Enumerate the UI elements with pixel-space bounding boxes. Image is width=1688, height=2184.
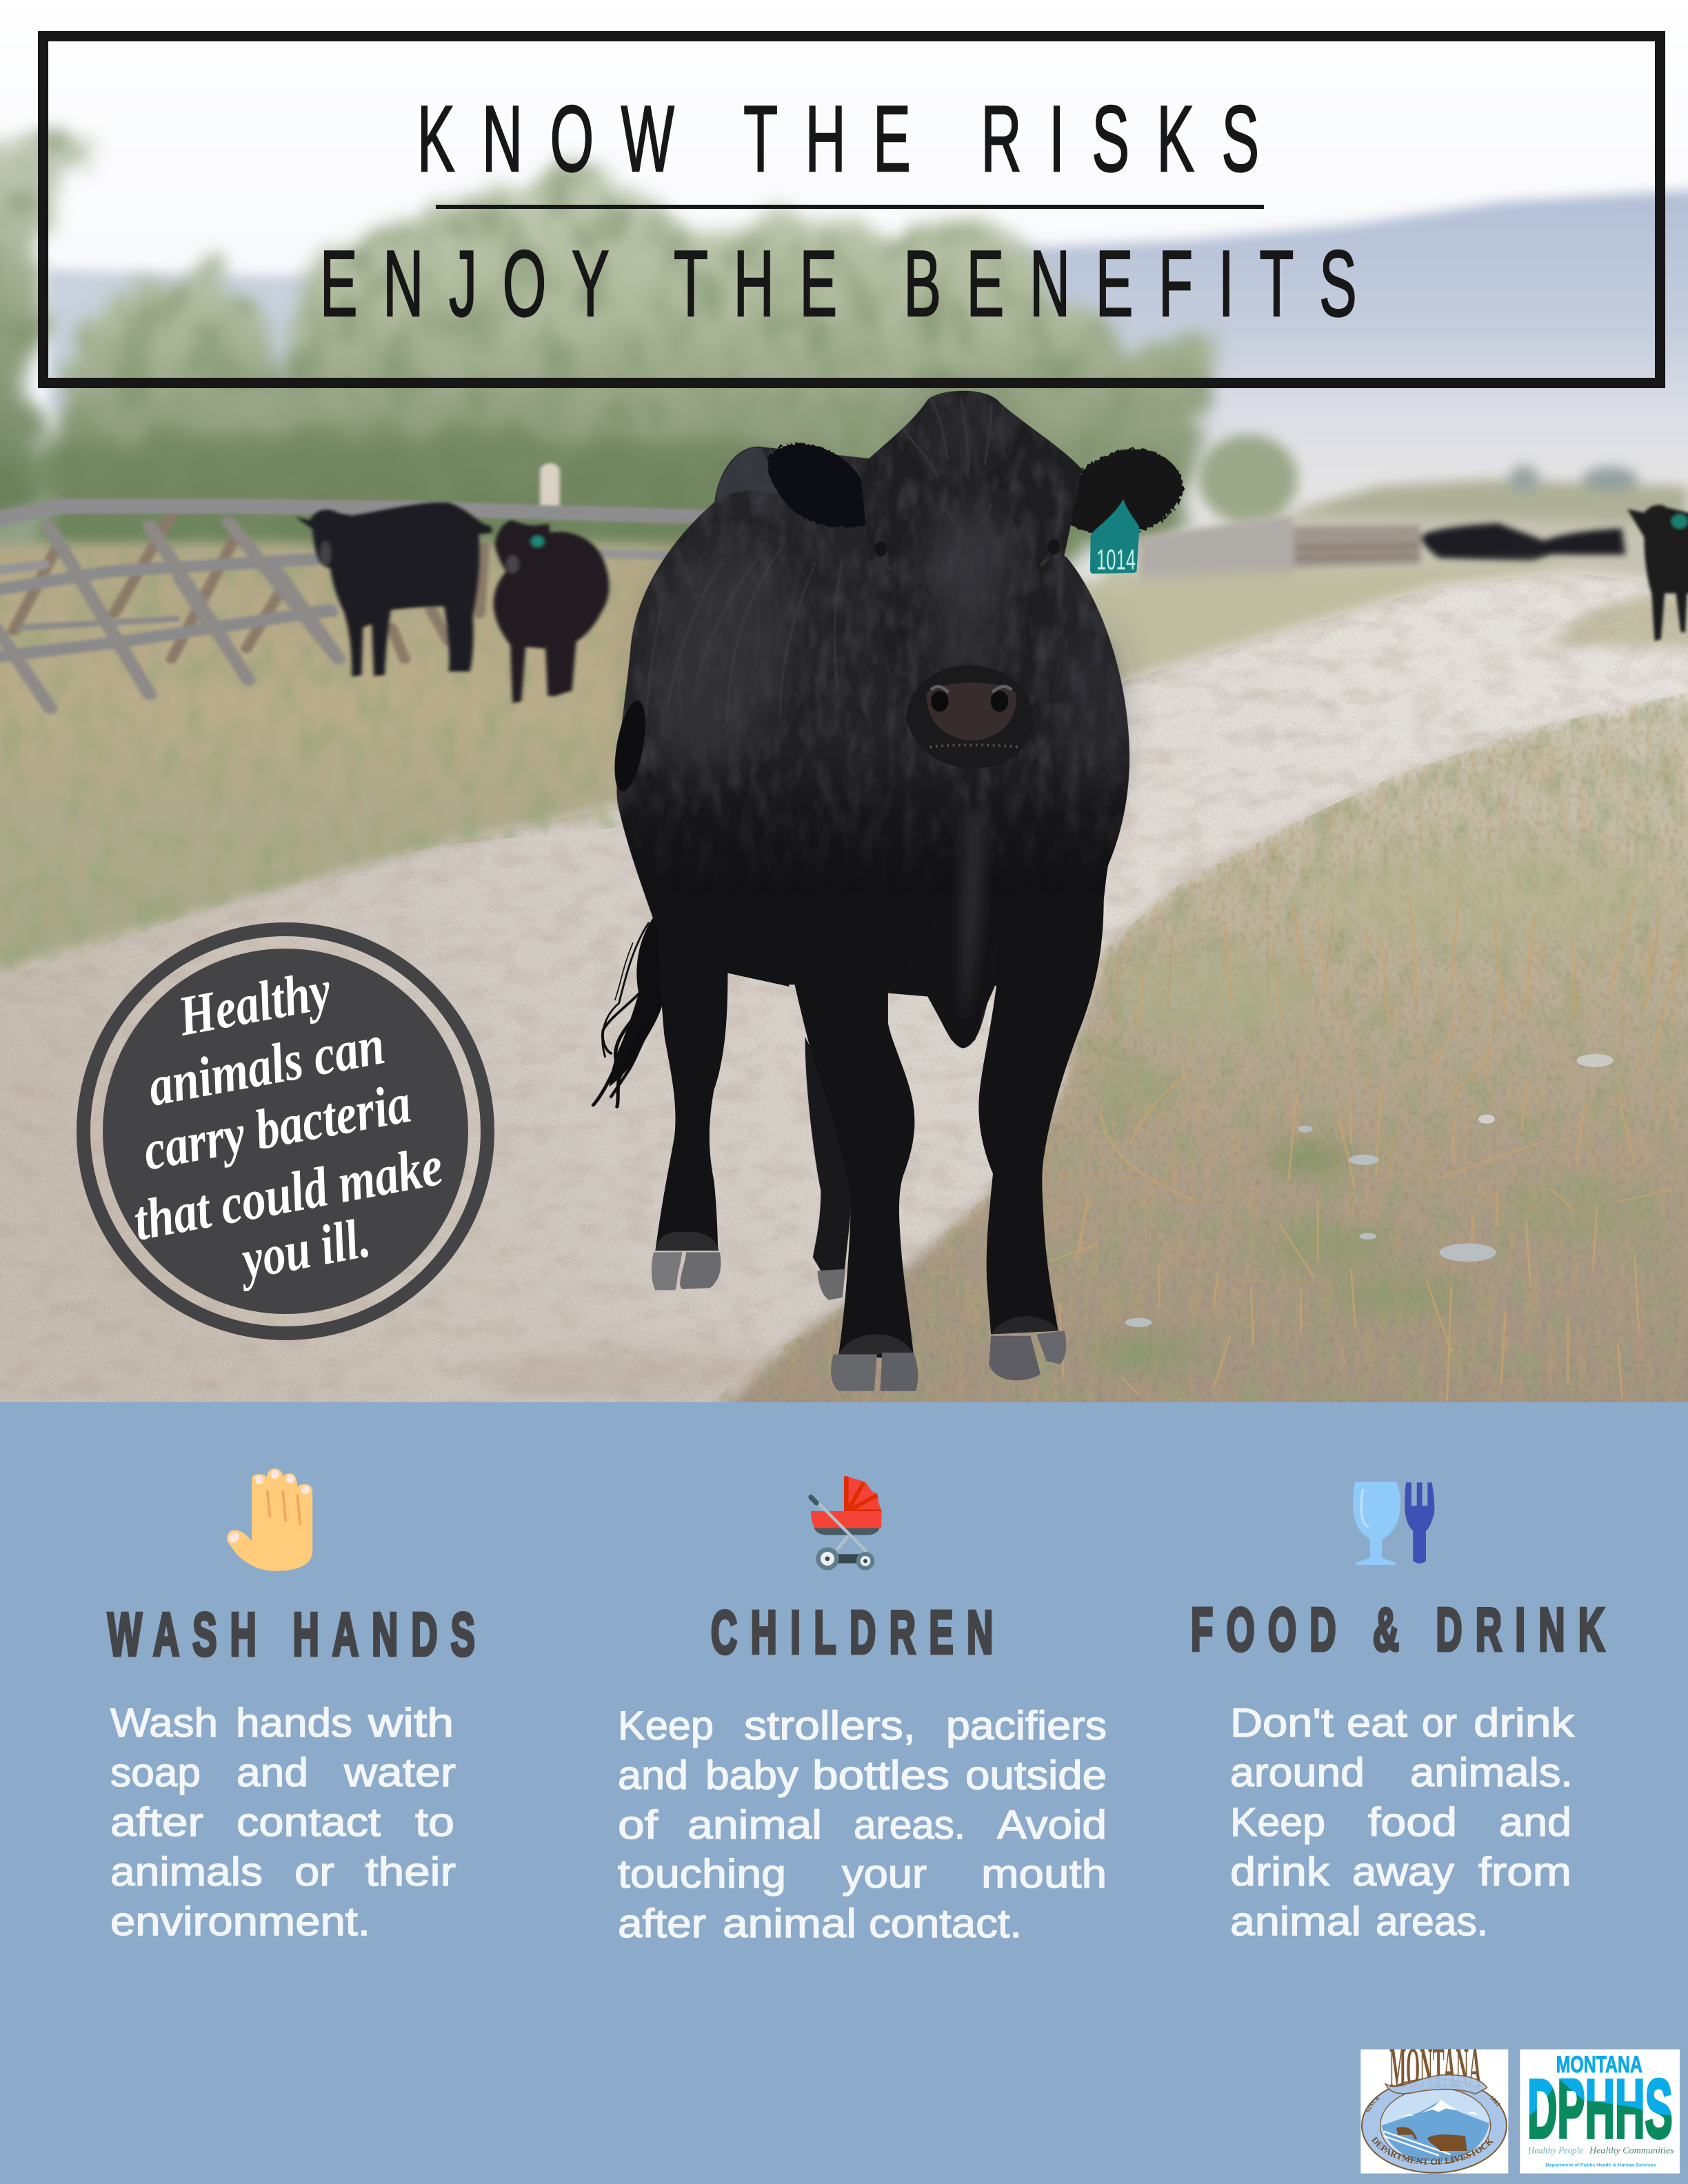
text: children	[618, 1703, 1107, 1946]
text: children: strollers,	[744, 1703, 916, 1748]
logo: Montana Department of Livestock: SINCE	[1366, 2096, 1380, 2112]
cow tail	[593, 913, 665, 1107]
text: wash hands	[110, 1701, 456, 1944]
text: children: of	[618, 1803, 659, 1848]
text: children: after	[618, 1901, 706, 1946]
title divider	[436, 205, 1264, 209]
text: wash hands: hands	[236, 1701, 352, 1746]
cow dewlap sheen	[961, 812, 985, 1023]
logo: Montana Department of Livestock: DEPARTMENT OF LIVESTOCK	[1371, 2136, 1494, 2165]
right ear	[1062, 449, 1184, 534]
text: wash hands: Wash	[110, 1701, 218, 1746]
callout text: carry bacteria	[139, 1071, 416, 1182]
text: MONTANA	[1389, 2036, 1481, 2100]
text: wash hands: or	[294, 1850, 334, 1894]
text: children: contact.	[869, 1901, 1022, 1946]
text: wash hands: their	[365, 1850, 456, 1894]
text: children: touching	[618, 1852, 786, 1897]
background: distant shrubs	[1103, 434, 1688, 662]
photo: cow on ranch road	[0, 0, 1688, 1420]
text: wash hands: contact	[237, 1800, 381, 1845]
text: food and drink: animals.	[1410, 1750, 1573, 1795]
left fence	[0, 471, 704, 709]
heading: children: CHILDREN	[711, 1599, 993, 1666]
text: children: baby	[705, 1753, 798, 1798]
background cow at right edge	[1627, 505, 1688, 641]
logo: Montana Department of Livestock	[1360, 2036, 1509, 2174]
text: food and drink: drink	[1474, 1701, 1575, 1746]
text: children: Keep	[618, 1703, 714, 1748]
body lower shadow fade	[616, 738, 1129, 986]
grass texture, right field	[710, 692, 1688, 1402]
text: children: bottles	[812, 1753, 950, 1798]
logo: Montana DPHHS: Healthy People	[1527, 2145, 1583, 2156]
text: food and drink: around	[1230, 1750, 1365, 1795]
grass texture, left	[0, 553, 626, 978]
text: wash hands: after	[110, 1800, 203, 1845]
logo: Montana Department of Livestock: 1885	[1489, 2096, 1500, 2107]
callout text: Healthy	[173, 958, 336, 1048]
text: food and drink: or	[1422, 1701, 1457, 1746]
ear tag	[1090, 499, 1139, 574]
background: far fence and distant herd	[1141, 516, 1625, 588]
text: wash hands: soap	[110, 1750, 201, 1795]
text: food and drink: Don't	[1230, 1701, 1334, 1746]
ground: grass left, right strip, road and right field	[0, 545, 1688, 1420]
text: children: areas.	[854, 1803, 965, 1848]
logo: Montana DPHHS	[1520, 2050, 1680, 2174]
text: food and drink: from	[1478, 1850, 1571, 1894]
text: children: animal	[687, 1803, 822, 1848]
text: children: outside	[965, 1753, 1107, 1798]
background: trees	[0, 124, 1212, 572]
text: wash hands: and	[237, 1750, 308, 1795]
text: children: animal	[723, 1901, 856, 1946]
text: food and drink: food	[1368, 1800, 1457, 1845]
text: food and drink: away	[1352, 1850, 1454, 1894]
title frame	[43, 36, 1660, 383]
ear tag number: 1014	[1096, 543, 1136, 576]
logo: Montana DPHHS: Department of Public Health & Human Services	[1546, 2163, 1656, 2167]
cow far front leg	[805, 1037, 852, 1300]
muzzle and nose	[906, 665, 1034, 768]
text: wash hands: with	[368, 1701, 454, 1746]
cow rear leg and hoof	[652, 896, 789, 1290]
title line one: KNOW THE RISKS	[417, 85, 1259, 191]
icon: glass and fork	[1353, 1482, 1434, 1565]
cow front legs and hooves	[777, 896, 1104, 1391]
text: food and drink: eat	[1347, 1701, 1407, 1746]
logo: Montana DPHHS: Healthy Communities	[1589, 2145, 1674, 2156]
text: food and drink: drink	[1230, 1850, 1330, 1894]
callout badge	[83, 929, 488, 1333]
text: food and drink: and	[1499, 1800, 1571, 1845]
text: children: and	[618, 1753, 688, 1798]
heading: wash hands: WASH HANDS	[108, 1601, 475, 1668]
title line two: ENJOY THE BENEFITS	[320, 230, 1357, 336]
icon: stroller	[811, 1476, 881, 1570]
cow body	[609, 447, 1129, 1049]
text: wash hands: water	[343, 1750, 456, 1795]
callout text: you ill.	[232, 1206, 374, 1292]
background cows near fence	[296, 503, 609, 703]
dry grass stalks and stones	[1043, 896, 1676, 1401]
text: wash hands: to	[415, 1800, 454, 1845]
callout text: animals can	[143, 1013, 389, 1118]
text: children: pacifiers	[946, 1703, 1107, 1748]
text: food and drink: areas.	[1376, 1899, 1488, 1944]
text: food and drink: animal	[1230, 1899, 1361, 1944]
background: sky and hills	[0, 0, 1688, 586]
text: food and drink: Keep	[1230, 1800, 1325, 1845]
main black cow	[593, 391, 1184, 1391]
text: children: Avoid	[997, 1803, 1107, 1848]
cow head	[768, 391, 1184, 769]
callout text	[129, 958, 448, 1292]
heading: food and drink: FOOD & DRINK	[1191, 1596, 1605, 1664]
text: children: your	[842, 1852, 927, 1897]
text: wash hands: environment.	[110, 1899, 370, 1944]
eyes	[874, 542, 887, 556]
blue panel	[0, 1402, 1688, 2184]
text: food and drink	[1230, 1701, 1575, 1944]
text: children: mouth	[981, 1852, 1107, 1897]
text: wash hands: animals	[110, 1850, 263, 1894]
left ear	[768, 443, 870, 527]
logo: Montana DPHHS: MONTANA	[1556, 2052, 1642, 2078]
icon: raised hand	[227, 1468, 312, 1571]
road gravel texture	[0, 552, 1688, 1406]
ground patches: dirt, green tufts	[476, 848, 1669, 1403]
callout text: that could make	[129, 1134, 448, 1253]
